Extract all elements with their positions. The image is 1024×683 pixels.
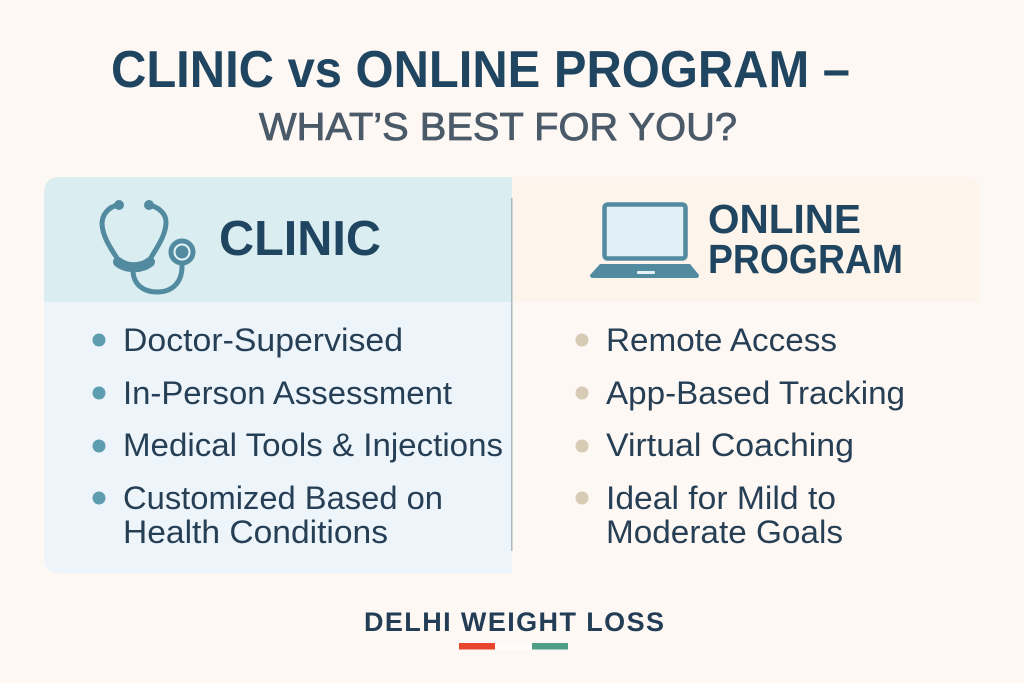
online list: Moderate Goals [606, 514, 843, 550]
title: CLINIC vs ONLINE PROGRAM – [111, 41, 850, 99]
online list [576, 322, 905, 550]
flag stripes [459, 643, 568, 650]
online header band [512, 177, 980, 302]
title [111, 41, 850, 149]
clinic list: Doctor-Supervised [123, 322, 403, 358]
online list: Remote Access [606, 322, 837, 358]
online heading: ONLINE [708, 196, 861, 242]
panel: online program [511, 177, 980, 551]
clinic list [92, 322, 503, 550]
divider [511, 198, 512, 551]
brand footer: DELHI WEIGHT LOSS [364, 607, 664, 637]
clinic list: In-Person Assessment [123, 375, 452, 411]
clinic list: Health Conditions [123, 514, 388, 550]
clinic panel background [44, 302, 512, 573]
panel: online program: PROGRAM [708, 236, 903, 282]
clinic list: Customized Based on [123, 480, 443, 516]
clinic header band [44, 177, 512, 302]
clinic list: Medical Tools & Injections [123, 427, 503, 463]
online list: Virtual Coaching [606, 427, 854, 463]
title: WHAT’S BEST FOR YOU? [259, 106, 737, 149]
panel: clinic [44, 177, 512, 573]
online list: Ideal for Mild to [606, 480, 836, 516]
clinic heading: CLINIC [219, 212, 381, 266]
online list: App-Based Tracking [606, 375, 905, 411]
icon: stethoscope [102, 200, 193, 292]
icon: laptop [590, 204, 699, 278]
